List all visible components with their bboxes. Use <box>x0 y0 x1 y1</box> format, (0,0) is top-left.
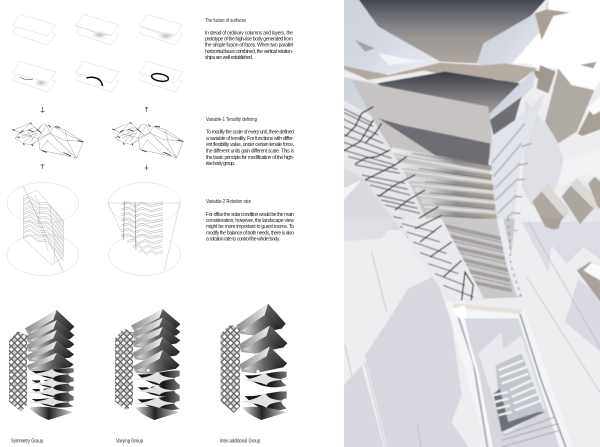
body copy: consideration; however, the landscape view <box>206 218 294 224</box>
rotated body <box>121 202 163 255</box>
block bottom of tall group <box>544 220 561 230</box>
body copy <box>206 212 294 242</box>
arrow: up <box>145 107 148 112</box>
surface pair 4 <box>12 61 56 92</box>
diagram: rotation rate right <box>108 182 180 276</box>
text block: variable-1 tensility defining <box>206 117 294 167</box>
body copy: prototype of the high-rise body generated from <box>205 37 293 43</box>
body copy <box>206 130 294 167</box>
body copy: To modify the scale of every unit, there defined <box>206 130 294 136</box>
front block 2 <box>562 178 600 224</box>
glass fringe <box>488 95 544 232</box>
surface pair 5 <box>76 61 119 92</box>
text block: variable-2 rotation rate <box>206 199 294 242</box>
arrow: up lower <box>40 164 44 169</box>
site lines <box>345 222 600 447</box>
heading: Variable-1 Tensility defining <box>206 117 257 123</box>
caption: varying group: Varying Group <box>116 438 143 444</box>
tall block <box>545 62 598 143</box>
text block: the fusion of surfaces <box>205 18 293 61</box>
site ground <box>330 0 600 447</box>
body copy: modify the balance of both needs, there is also <box>206 230 294 236</box>
ground and shadows upper <box>332 0 600 230</box>
heading: Variable-2 Rotation rate <box>206 199 251 205</box>
caption: symmetry group: Symmetry Group <box>11 438 43 444</box>
diagram: tensility network left <box>12 123 83 158</box>
body copy: a rotation rate to control the whole body. <box>206 236 280 242</box>
block at right edge <box>576 262 600 302</box>
podium frame <box>450 303 567 447</box>
diagram: fusion of surfaces planes <box>12 14 183 92</box>
render: symmetry group <box>9 310 74 420</box>
facade lattice <box>344 102 439 240</box>
body copy: horizontal faces combined, the vertical relation- <box>205 49 293 55</box>
caption: inter-additional group: Inter-additional Group <box>220 438 260 444</box>
tower mid floors <box>344 80 544 238</box>
heading: The fusion of surfaces <box>205 18 246 24</box>
rendering: tower perspective <box>330 0 600 447</box>
render: varying group <box>115 309 180 420</box>
front block 1 <box>532 184 569 230</box>
body copy: For office the solar condition would be the main <box>206 212 294 218</box>
tower base and podium <box>345 215 600 447</box>
body copy: the different units gain different scale. This is <box>206 148 294 154</box>
floor bands <box>391 147 498 220</box>
surface pair 3 <box>139 14 183 45</box>
right edge block <box>578 97 600 136</box>
floor 1 <box>332 0 570 83</box>
rotation ellipses <box>108 182 180 276</box>
body copy: the basic principle for modification of the high- <box>206 155 294 161</box>
surface pair 2 <box>76 14 119 45</box>
city blocks <box>532 62 600 230</box>
body copy: ships are well established. <box>205 55 253 61</box>
body copy: rise body group. <box>206 161 235 167</box>
floor 3 <box>378 118 490 168</box>
diagram: rotation rate left <box>7 182 79 276</box>
floor mass <box>352 80 496 219</box>
diagram: tensility network right <box>112 122 183 158</box>
floor 2 <box>344 63 540 128</box>
render: inter-additional group <box>221 304 287 420</box>
small rear block <box>537 65 556 93</box>
rotation axis <box>108 203 180 271</box>
arrow: down lower <box>144 165 148 170</box>
front block 3 <box>588 177 600 208</box>
arrow: down <box>40 107 44 113</box>
body copy: might be more important to guest rooms. To <box>206 224 294 230</box>
tower top floors <box>344 0 570 128</box>
rotated body <box>23 190 63 265</box>
body copy <box>205 30 293 61</box>
lower tower <box>398 215 522 300</box>
podium building <box>493 354 560 447</box>
surface pair 6 <box>139 61 183 92</box>
body copy: a variable of tensility. For functions with differ- <box>206 136 294 142</box>
ground shadows lower <box>332 219 600 447</box>
rotation axis <box>23 186 63 271</box>
body copy: the simple fusion of faces. When two parallel <box>205 43 293 49</box>
surface pair 1 <box>12 14 56 45</box>
rotation ellipses <box>7 182 79 276</box>
body copy: ent flexibility value, under certain tensile force, <box>206 142 294 148</box>
body copy: In stead of ordinary columns and layers, the <box>205 30 293 36</box>
